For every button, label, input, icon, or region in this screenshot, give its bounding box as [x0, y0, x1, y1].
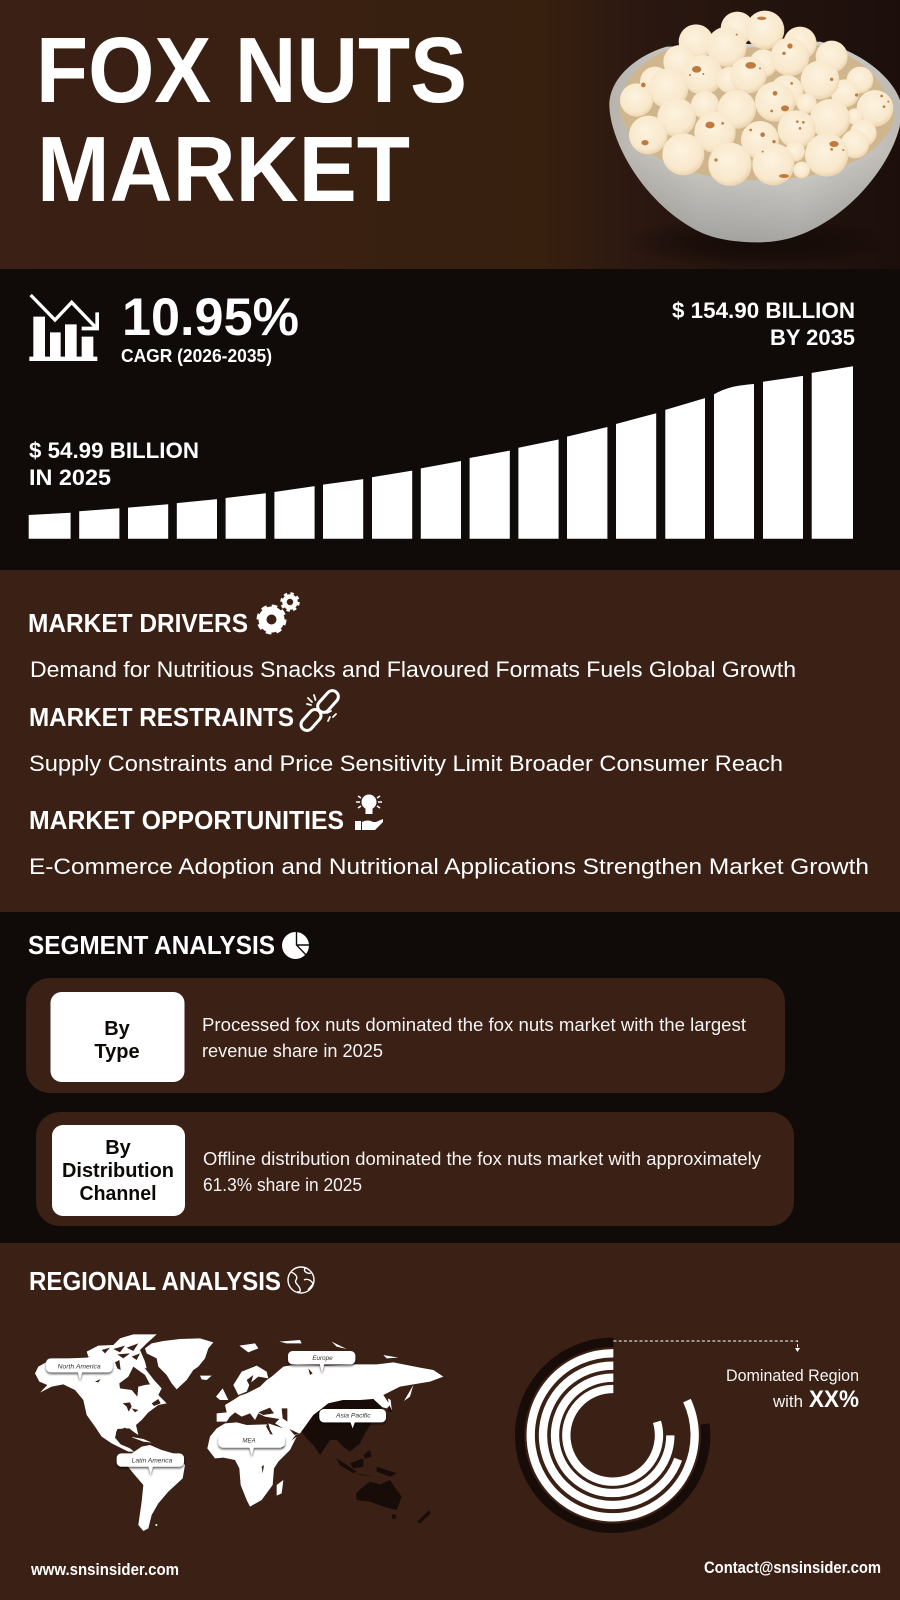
title: MARKET	[37, 117, 410, 221]
world map	[35, 1334, 443, 1531]
text: by distribution channel: Offline distribution dominated the fox nuts market with approximately	[203, 1149, 761, 1169]
callout: Europe	[288, 1351, 355, 1372]
label box: by distribution channel: Channel	[80, 1183, 156, 1205]
callout: dominated region: with	[772, 1392, 803, 1411]
CAGR value: 10.95%	[122, 288, 299, 347]
label box: by type	[50, 992, 184, 1082]
text: by type	[202, 1015, 746, 1061]
label box: by type: Type	[94, 1041, 140, 1063]
footer: contact: Contact@snsinsider.com	[704, 1559, 881, 1577]
callout: dominated region	[726, 1366, 859, 1413]
opportunity text: E-Commerce Adoption and Nutritional Applications Strengthen Market Growth	[29, 854, 869, 879]
radial bar chart	[520, 1342, 706, 1528]
card: by type	[26, 978, 785, 1093]
callout: North America: North America	[58, 1363, 101, 1370]
icon: pie chart	[282, 932, 310, 959]
heading: market drivers: MARKET DRIVERS	[28, 608, 248, 638]
panel: header background	[0, 0, 900, 269]
CAGR label: CAGR (2026-2035)	[121, 346, 272, 366]
region: Asia Pacific highlighted	[302, 1399, 431, 1523]
callout: Latin America: Latin America	[132, 1457, 173, 1464]
map: Americas	[35, 1334, 213, 1531]
icon: bulb in hand	[355, 794, 383, 830]
card: by distribution channel	[36, 1112, 794, 1226]
heading: segment analysis: SEGMENT ANALYSIS	[28, 930, 275, 960]
icon: chart with falling arrow	[29, 295, 99, 361]
callout: MEA	[218, 1434, 285, 1456]
icon: gears	[258, 594, 298, 633]
icon: broken chain	[299, 688, 341, 733]
panel: market size band	[0, 269, 900, 570]
dotted connector arrow	[614, 1341, 800, 1352]
text: by type: revenue share in 2025	[202, 1041, 383, 1061]
icon: globe	[288, 1267, 314, 1293]
text: by distribution channel: 61.3% share in 2025	[203, 1175, 362, 1195]
callout: Asia Pacific: Asia Pacific	[335, 1413, 372, 1420]
callout: dominated region: Dominated Region	[726, 1366, 859, 1385]
value 2035	[672, 298, 855, 350]
restraint text: Supply Constraints and Price Sensitivity Limit Broader Consumer Reach	[29, 751, 783, 776]
footer: website: www.snsinsider.com	[30, 1561, 179, 1579]
bar chart	[29, 366, 853, 539]
callout: Asia Pacific	[319, 1409, 386, 1428]
callout: Europe: Europe	[312, 1355, 333, 1362]
title: FOX NUTS	[36, 18, 467, 122]
heading: market restraints: MARKET RESTRAINTS	[29, 702, 294, 732]
label box: by distribution channel: Distribution	[62, 1160, 174, 1182]
callout: dominated region: XX%	[809, 1386, 859, 1413]
label box: by type: By	[104, 1018, 131, 1040]
image: bowl of fox nuts	[609, 11, 900, 268]
callout: Latin America	[117, 1453, 184, 1474]
title	[36, 18, 467, 221]
panel: market dynamics	[28, 594, 869, 879]
value 2035: $ 154.90 BILLION	[672, 298, 855, 323]
panel: segment analysis	[0, 912, 900, 1243]
value 2025: IN 2025	[29, 465, 111, 490]
label box: by distribution channel: By	[105, 1137, 132, 1159]
map: Europe, Asia, Africa, Oceania	[207, 1340, 443, 1523]
label box: by distribution channel	[52, 1125, 185, 1216]
heading: regional analysis: REGIONAL ANALYSIS	[29, 1266, 281, 1296]
value 2035: BY 2035	[770, 325, 855, 350]
callout: North America	[46, 1358, 113, 1380]
heading: market opportunities: MARKET OPPORTUNITIES	[29, 805, 344, 835]
callout: MEA: MEA	[242, 1438, 256, 1445]
value 2025: $ 54.99 BILLION	[29, 438, 199, 463]
driver text: Demand for Nutritious Snacks and Flavoured Formats Fuels Global Growth	[30, 657, 796, 682]
text: by distribution channel	[203, 1149, 761, 1195]
text: by type: Processed fox nuts dominated the fox nuts market with the largest	[202, 1015, 746, 1035]
value 2025	[29, 438, 199, 490]
